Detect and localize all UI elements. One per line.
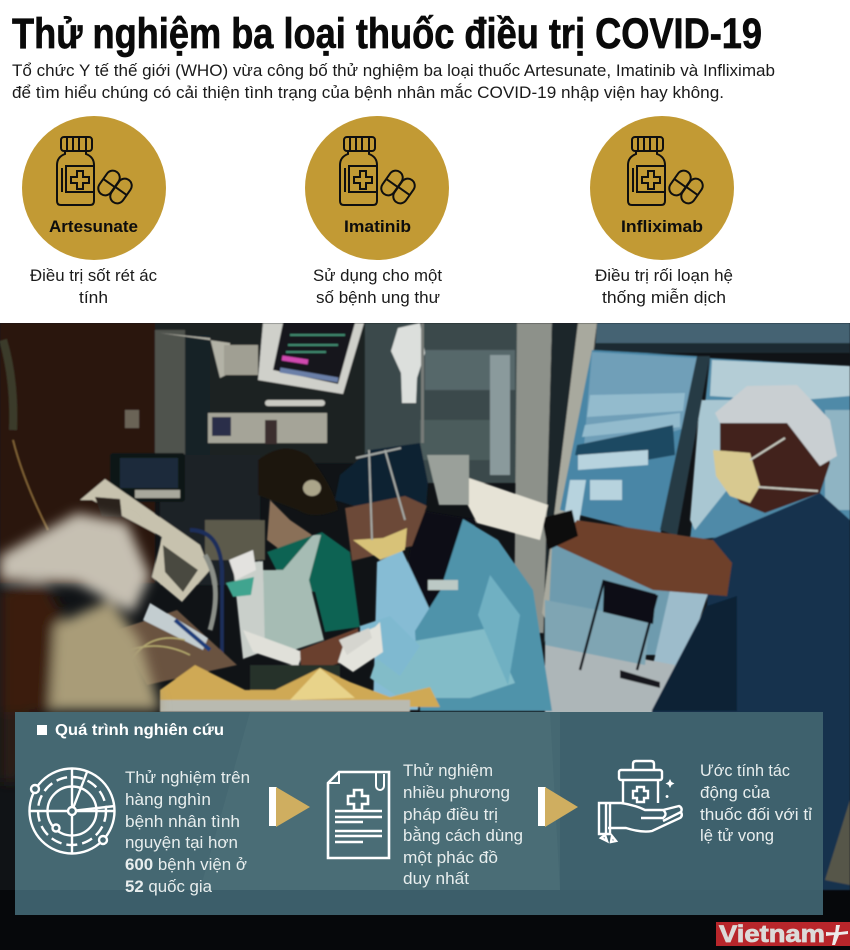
- drug card: Infliximab: Infliximab: [621, 218, 703, 236]
- step 1 text: 52 quốc gia: [125, 878, 213, 896]
- icon: radar: [29, 768, 115, 854]
- icon: sparkle: [666, 779, 674, 798]
- arrow 2: [538, 787, 578, 827]
- panel heading: Quá trình nghiên cứu: [55, 722, 224, 739]
- right side below panel: [825, 800, 850, 885]
- drug card: Infliximab: [590, 116, 734, 307]
- drug card: Infliximab: thống miễn dịch: [602, 288, 726, 307]
- drug card: Artesunate: Điều trị sốt rét ác: [30, 267, 157, 285]
- step 1 text: 600 bệnh viện ở: [125, 856, 247, 874]
- panel: research process: [15, 712, 823, 915]
- intro text: [12, 62, 775, 102]
- step 3 text: lệ tử vong: [700, 827, 774, 845]
- drug card: Imatinib: Sử dụng cho một: [313, 267, 442, 285]
- arrow 1: [269, 787, 310, 827]
- arm and glove: [557, 520, 732, 596]
- step 2 text: duy nhất: [403, 870, 469, 888]
- window right: [690, 358, 850, 540]
- photo: medical team in intensive care: [0, 323, 850, 950]
- window stairs: [560, 350, 698, 536]
- drug card: Artesunate: [22, 116, 166, 307]
- photo showing through the panel: [200, 712, 560, 890]
- central nurse: [408, 512, 477, 608]
- IV line: [3, 340, 13, 430]
- step 2 text: [403, 762, 523, 888]
- drug card: Infliximab: Điều trị rối loạn hệ: [595, 267, 733, 285]
- drug card: Imatinib: [305, 116, 449, 307]
- glass wall: [365, 323, 520, 483]
- drug card: Artesunate: Artesunate: [49, 218, 138, 236]
- bedside monitor: [258, 323, 364, 394]
- outside below the arm: [549, 544, 670, 656]
- step 1 text: Thử nghiệm trên: [125, 769, 250, 787]
- step 3 text: Ước tính tác: [700, 762, 790, 780]
- tablet: [110, 453, 185, 502]
- patient chest and sheets: [117, 610, 237, 685]
- step 3 text: động của: [700, 784, 771, 802]
- step 2 text: pháp điều trị: [403, 806, 498, 824]
- bed rail: [80, 479, 210, 602]
- arm bracket and pump: [160, 333, 230, 378]
- step 2 text: Thử nghiệm: [403, 762, 493, 780]
- logo: Vietnam+: [716, 921, 850, 948]
- chair: [603, 580, 656, 624]
- drug card: Imatinib: Imatinib: [344, 218, 411, 236]
- door frame: [514, 323, 552, 633]
- back wall: [0, 323, 155, 583]
- left nurse: [258, 449, 338, 515]
- step 1 text: nguyện tại hơn: [125, 834, 238, 852]
- blurred foreground arm: [0, 513, 150, 613]
- drug card: Imatinib: số bệnh ung thư: [316, 289, 440, 307]
- icon: medical document: [328, 772, 389, 858]
- doctor: [640, 493, 850, 890]
- step 3 text: [700, 762, 812, 845]
- logo: Vietnam+: Vietnam: [719, 921, 825, 948]
- ceiling: [595, 323, 850, 348]
- gown pin: [428, 580, 458, 590]
- step 1 text: [125, 769, 250, 896]
- step 2 text: một phác đồ: [403, 849, 498, 867]
- step 1 text: hàng nghìn: [125, 791, 211, 809]
- icon: hand holding medical kit: [599, 761, 682, 842]
- step 3 text: thuốc đối với tỉ: [700, 806, 812, 824]
- intro text: Tổ chức Y tế thế giới (WHO) vừa công bố thử nghiệm ba loại thuốc Artesunate, Imatinib và Infliximab: [12, 62, 775, 80]
- drug card: Artesunate: tính: [79, 289, 108, 307]
- IV bag: [391, 323, 425, 403]
- step 1 text: bệnh nhân tình: [125, 813, 240, 831]
- intro text: để tìm hiểu chúng có cải thiện tình trạng của bệnh nhân mắc COVID-19 nhập viện hay không.: [12, 83, 724, 102]
- step 2 text: bằng cách dùng: [403, 826, 523, 845]
- step 2 text: nhiều phương: [403, 784, 510, 802]
